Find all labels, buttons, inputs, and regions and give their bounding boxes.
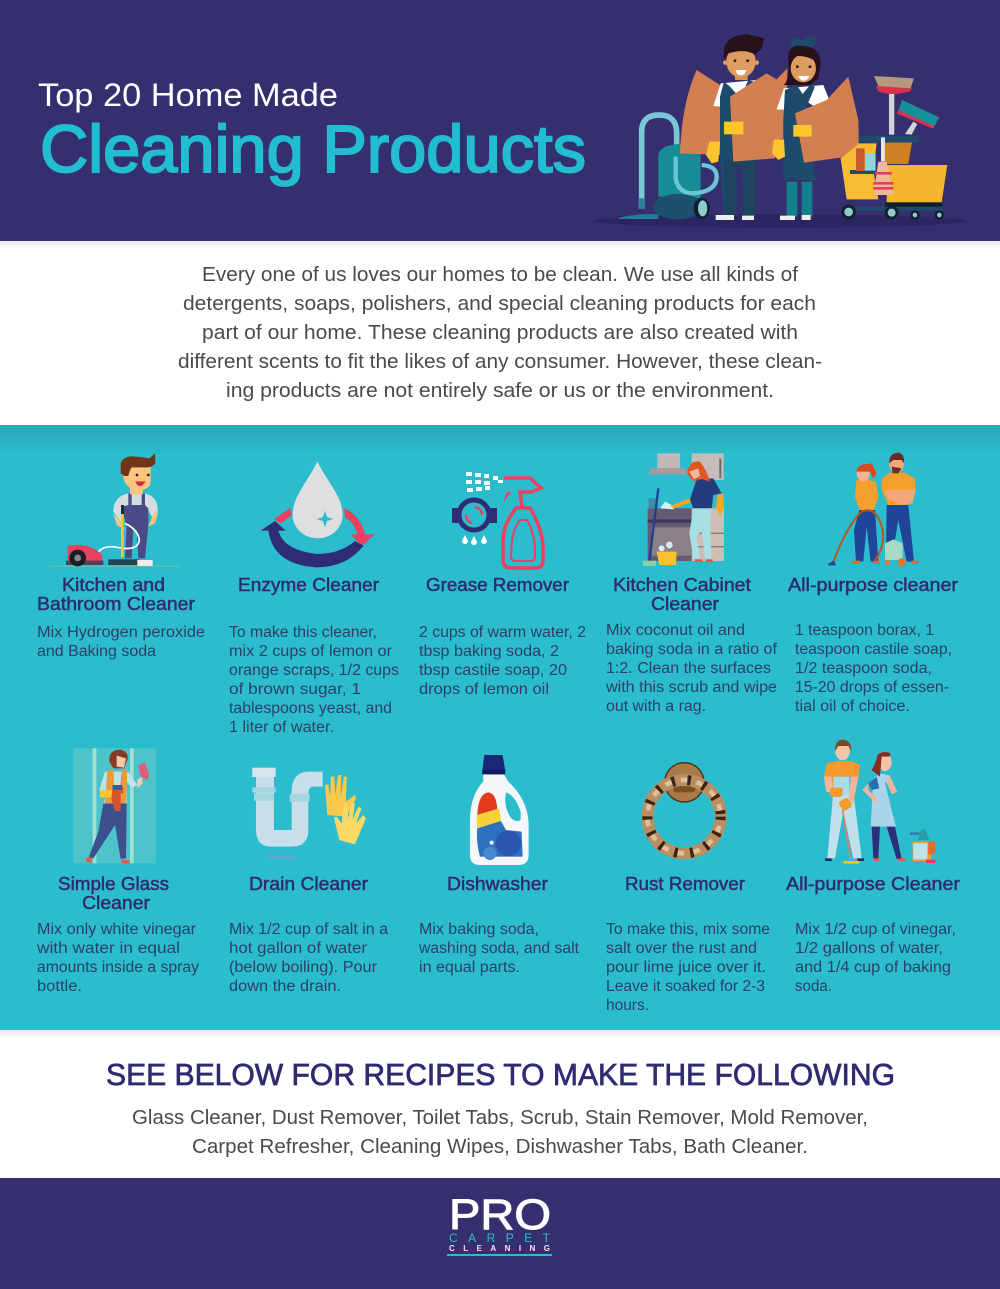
body text [37, 624, 205, 660]
body text: Mix Hydrogen peroxide [37, 624, 205, 641]
card: dishwasher [418, 755, 580, 976]
body text: and 1/4 cup of baking [795, 959, 951, 976]
body text: To make this cleaner, [229, 624, 377, 641]
heading [37, 575, 195, 614]
body text: 1:2. Clean the surfaces [606, 660, 771, 677]
body text: tbsp baking soda, 2 [419, 643, 559, 660]
card: drain cleaner [229, 768, 388, 995]
body text: with this scrub and wipe [605, 679, 777, 696]
body text: hours. [606, 997, 649, 1014]
body text [229, 921, 388, 995]
card: all-purpose cleaner two [786, 740, 960, 995]
illustration: cleaning crew with vacuum and cart [593, 34, 967, 228]
icon: cleaning couple with bucket [824, 740, 935, 864]
body text: 2 cups of warm water, 2 [419, 624, 586, 641]
body text: drops of lemon oil [419, 681, 549, 698]
intro paragraph: ing products are not entirely safe or us or the environment. [226, 380, 774, 402]
card: kitchen and bathroom cleaner [37, 453, 205, 660]
icon: woman cleaning glass [73, 748, 156, 863]
logo: Pro Carpet Cleaning: CARPET [449, 1231, 551, 1245]
body text: pour lime juice over it. [606, 959, 766, 976]
body text [795, 622, 952, 715]
heading: Dishwasher [447, 874, 548, 894]
body text: mix 2 cups of lemon or [229, 643, 392, 660]
recipe list text: Glass Cleaner, Dust Remover, Toilet Tabs, Scrub, Stain Remover, Mold Remover, [132, 1107, 868, 1129]
icon: detergent bottle [470, 755, 529, 865]
intro paragraph: Every one of us loves our homes to be clean. We use all kinds of [202, 264, 798, 286]
body text: of brown sugar, 1 [229, 681, 361, 698]
heading: Bathroom Cleaner [37, 594, 195, 614]
body text: and Baking soda [37, 643, 156, 660]
intro paragraph: part of our home. These cleaning products are also created with [202, 322, 798, 344]
body text: out with a rag. [606, 698, 706, 715]
icon: man with floor cleaner [50, 453, 180, 567]
panel: header [0, 0, 1000, 241]
icon: couple with vacuum [828, 453, 918, 566]
heading: Cleaner [651, 594, 719, 614]
heading [58, 874, 169, 913]
cleaning cart with supplies [841, 76, 947, 220]
icon: woman cleaning a kitchen [643, 453, 724, 566]
heading: Grease Remover [426, 575, 569, 595]
card: rust remover [606, 763, 770, 1014]
body text: 1/2 gallons of water, [795, 940, 943, 957]
body text: baking soda in a ratio of [606, 641, 778, 658]
body text: in equal parts. [419, 959, 520, 976]
body text: Mix coconut oil and [606, 622, 745, 639]
intro paragraph [178, 264, 822, 402]
body text: Mix 1/2 cup of vinegar, [795, 921, 956, 938]
recipe list text [132, 1107, 868, 1158]
card: simple glass cleaner [36, 748, 199, 995]
logo: Pro Carpet Cleaning: PRO [449, 1191, 551, 1239]
body text: teaspoon castile soap, [795, 641, 952, 658]
panel: teal recipes [0, 425, 1000, 1030]
heading: All-purpose Cleaner [786, 874, 960, 894]
body text: tablespoons yeast, and [229, 700, 392, 717]
body text: Mix baking soda, [419, 921, 539, 938]
body text [606, 921, 770, 1014]
vacuum cleaner [618, 115, 717, 219]
icon: drop with cycle arrows [261, 462, 375, 567]
section heading: see below: SEE BELOW FOR RECIPES TO MAKE THE FOLLOWING [106, 1058, 895, 1092]
body text: 1/2 teaspoon soda, [795, 660, 932, 677]
heading [613, 575, 751, 614]
body text [605, 622, 778, 715]
body text: Mix only white vinegar [37, 921, 196, 938]
icon: spray bottle and grease trap [452, 472, 543, 568]
body text: down the drain. [229, 978, 341, 995]
title line 1: Top 20 Home Made [38, 77, 338, 113]
card: enzyme cleaner [229, 462, 399, 736]
heading: Simple Glass [58, 874, 169, 894]
body text [795, 921, 956, 995]
body text [36, 921, 199, 995]
body text: salt over the rust and [606, 940, 757, 957]
body text: 1 teaspoon borax, 1 [795, 622, 934, 639]
body text: Leave it soaked for 2-3 [606, 978, 765, 995]
heading: Enzyme Cleaner [238, 575, 379, 595]
logo: Pro Carpet Cleaning [447, 1191, 552, 1256]
body text: 15-20 drops of essen- [795, 679, 949, 696]
body text: 1 liter of water. [229, 719, 334, 736]
heading: Kitchen and [62, 575, 165, 595]
logo: Pro Carpet Cleaning: CLEANING [449, 1244, 550, 1253]
title line 2: Cleaning Products [40, 112, 586, 187]
body text: with water in equal [36, 940, 180, 957]
body text: Mix 1/2 cup of salt in a [229, 921, 388, 938]
intro paragraph: different scents to fit the likes of any consumer. However, these clean- [178, 351, 822, 373]
woman with cardboard box [772, 36, 859, 220]
body text: amounts inside a spray [37, 959, 199, 976]
heading: All-purpose cleaner [788, 575, 958, 595]
icon: drain pipe and gloves [252, 768, 366, 859]
heading: Cleaner [82, 893, 150, 913]
body text: orange scraps, 1/2 cups [229, 662, 399, 679]
heading: Rust Remover [625, 874, 745, 894]
intro paragraph: detergents, soaps, polishers, and special cleaning products for each [183, 293, 816, 315]
icon: rusty rope door knocker [647, 763, 721, 853]
body text: bottle. [37, 978, 82, 995]
body text: tial oil of choice. [795, 698, 910, 715]
card: all-purpose cleaner [788, 453, 958, 715]
body text [419, 624, 586, 698]
card: grease remover [419, 472, 586, 698]
body text: hot gallon of water [229, 940, 367, 957]
panel: footer [0, 1178, 1000, 1289]
body text [418, 921, 580, 976]
heading: Kitchen Cabinet [613, 575, 751, 595]
body text: soda. [795, 978, 832, 995]
body text: (below boiling). Pour [229, 959, 377, 976]
heading: Drain Cleaner [249, 874, 368, 894]
body text [229, 624, 399, 736]
card: kitchen cabinet cleaner [605, 453, 778, 715]
body text: tbsp castile soap, 20 [419, 662, 567, 679]
man with cardboard box [680, 34, 787, 220]
recipe list text: Carpet Refresher, Cleaning Wipes, Dishwasher Tabs, Bath Cleaner. [192, 1136, 808, 1158]
body text: washing soda, and salt [418, 940, 580, 957]
body text: To make this, mix some [606, 921, 770, 938]
